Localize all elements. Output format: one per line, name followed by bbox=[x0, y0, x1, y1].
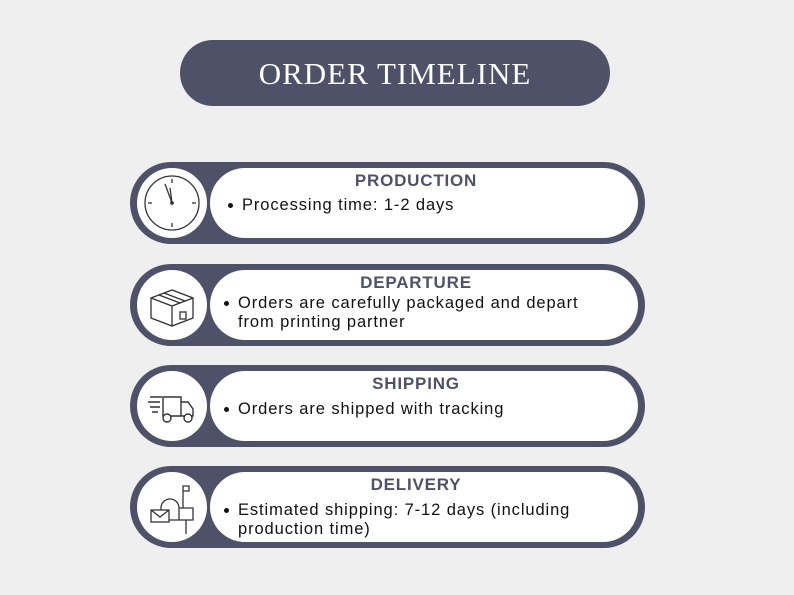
card: Estimated shipping: 7-12 days (including bbox=[238, 501, 570, 519]
icon: box bbox=[137, 270, 207, 340]
icon: mailbox bbox=[137, 472, 207, 542]
card: SHIPPING bbox=[372, 374, 460, 393]
card: Orders are shipped with tracking bbox=[238, 400, 504, 418]
title bbox=[180, 40, 610, 106]
card: DELIVERY bbox=[371, 475, 461, 494]
card: DEPARTURE bbox=[360, 273, 472, 292]
panel: shipping bbox=[130, 365, 645, 447]
card: Processing time: 1-2 days bbox=[242, 196, 454, 214]
panel: production bbox=[130, 162, 645, 244]
card: Orders are carefully packaged and depart bbox=[238, 294, 579, 312]
icon: clock bbox=[137, 168, 207, 238]
card bbox=[210, 371, 638, 441]
card bbox=[210, 168, 638, 238]
title: ORDER TIMELINE bbox=[259, 56, 531, 91]
card bbox=[210, 270, 638, 340]
panel: departure bbox=[130, 264, 645, 346]
card: from printing partner bbox=[238, 313, 405, 331]
card: production time) bbox=[238, 520, 371, 538]
icon: truck bbox=[137, 371, 207, 441]
panel: delivery bbox=[130, 466, 645, 548]
card: PRODUCTION bbox=[355, 171, 477, 190]
card bbox=[210, 472, 638, 542]
